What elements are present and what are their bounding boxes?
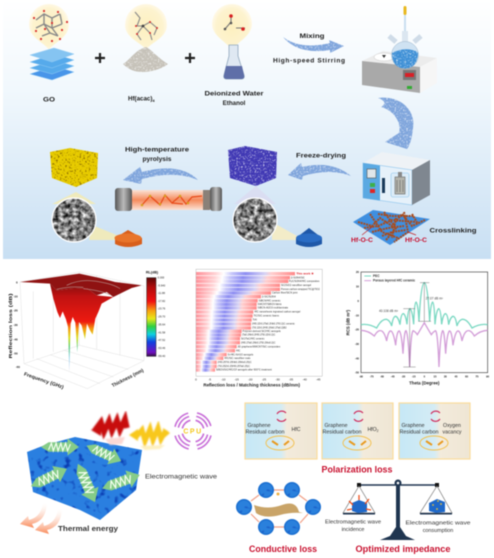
x axis ticks: 60 [465, 375, 469, 379]
colorbar: -17.82 [158, 299, 166, 303]
colorbar: -47.52 [158, 338, 166, 342]
label: High-temperature pyrolysis: pyrolysis [143, 156, 172, 163]
bar labels: PyC/Si3N4/HfC composites [289, 280, 320, 283]
icon: conductive network [236, 482, 321, 535]
y axis ticks: 20 [356, 270, 359, 274]
x axis ticks: -15 [412, 375, 416, 379]
icon: Hf(acac)4 molecule and powder [123, 4, 168, 72]
panel: polarization oxygen vacancy: Graphene [402, 423, 425, 429]
panel: polarization oxygen vacancy: Oxygen [443, 423, 461, 429]
x axis ticks: -60 [380, 375, 384, 379]
label: Mixing: Mixing [300, 33, 324, 40]
y axis title: RCS (dB m²) [345, 309, 350, 335]
x axis ticks: -45 [316, 377, 321, 381]
colorbar: -35.64 [158, 322, 166, 326]
x axis ticks: -15 [234, 377, 239, 381]
panel: polarization HfO2: HfO [367, 427, 377, 433]
panel: polarization HfC: HfC [292, 427, 301, 433]
colorbar: -41.58 [158, 330, 166, 334]
y axis title: Reflection loss (dB) [8, 293, 14, 358]
arrow: mixing [283, 37, 344, 53]
icon: green coil arrows [27, 438, 143, 506]
label: Electromagnetic wave: Electromagnetic wave [145, 474, 218, 480]
colorbar: -5.940 [158, 283, 166, 287]
icon: blue foam cube, SEM and powder [228, 146, 322, 247]
back panes and floor grid [20, 272, 144, 389]
label: GO: GO [43, 96, 55, 104]
icon: GO molecule and layers [29, 4, 74, 80]
icon: plus [185, 53, 195, 63]
x axis ticks: -20 [248, 377, 253, 381]
thickness axis title: Thickness (mm) [111, 368, 145, 389]
colorbar: -59.40 [158, 354, 166, 358]
arrow: freeze-drying [288, 163, 351, 180]
legend [364, 274, 415, 283]
icon: crosslinked network [353, 210, 430, 245]
bar labels: SiBCN/SiC/HfC/CF aerogels after 900°C treatment [216, 369, 272, 372]
x axis ticks: -5 [208, 377, 211, 381]
x axis ticks [359, 375, 490, 379]
bar labels: (Hf0.2Zr0.2Ta0.2Nb0.2Ti0.2)C ceramic [252, 323, 295, 326]
icon: oven with autoclave [363, 152, 430, 205]
bar labels: TiC/SiC ceramic foams [254, 315, 280, 318]
panel: polarization oxygen vacancy: Residual carbon [400, 430, 439, 436]
panel: polarization HfC: Graphene [248, 423, 271, 429]
colorbar: -23.76 [158, 307, 166, 311]
colorbar: -53.46 [158, 346, 166, 350]
panel: polarization HfC: Residual carbon [246, 430, 285, 436]
x axis ticks: 90 [486, 375, 490, 379]
label: Crosslinking: Crosslinking [430, 228, 476, 234]
colorbar: 0.000 [158, 276, 165, 280]
heading: Polarization loss: Polarization loss [322, 464, 392, 474]
label: Electromagnetic wave incidence: Electromagnetic wave [325, 520, 381, 526]
y axis ticks: -30 [355, 342, 359, 346]
y axis ticks: -10 [355, 313, 359, 317]
arrow: pyrolysis [123, 167, 198, 184]
annotation: left peak: 40.108 dB m² [379, 309, 398, 313]
colorbar: -29.70 [158, 315, 166, 319]
icon: yellow foam cube, SEM and powder [50, 148, 142, 247]
label: Freeze-drying: Freeze-drying [296, 152, 346, 160]
y axis ticks: -40 [13, 337, 18, 341]
colorbar: RL(dB) [146, 271, 159, 275]
y axis ticks: 0 [357, 299, 359, 303]
x axis ticks: 15 [434, 375, 437, 379]
arrow: to crosslinking [378, 98, 413, 149]
panel: polarization HfO2: 2 [377, 429, 379, 433]
label: Hf-O-C left: Hf-O-C [351, 237, 374, 244]
colorbar [146, 271, 166, 358]
bar labels: (Hf0.2Ta0.2Nb0.2Ti0.2Mo0.2)C [241, 341, 276, 344]
bar labels: (Ti0.2Zr0.2Hf0.2Nb0.2Ta0.2)B2 [252, 327, 287, 330]
heading: Conductive loss: Conductive loss [249, 544, 317, 554]
chart: RCS versus theta [345, 270, 490, 386]
bar labels: SiBCN-Al2O3 multilaminate [258, 307, 289, 310]
y axis ticks: 0 [16, 280, 18, 284]
x axis ticks: -75 [370, 375, 374, 379]
bar labels: (Ta0.2Nb0.2Hf0.2Ti0.2Zr0.2)C [242, 334, 276, 337]
panel: polarization HfC [245, 403, 317, 459]
bar labels: SWCNT/SiBCN fabric [258, 303, 282, 306]
bar labels: Si-HfC-N/rGO aerogels [228, 353, 254, 356]
bar labels: TiAl [253, 319, 257, 322]
bar labels: β-Si3N4/SiC [291, 276, 305, 279]
chart: reflection loss / matching thickness comparison [195, 269, 322, 388]
green curve [361, 283, 488, 328]
label: Electromagnetic wave consumption: consumption [423, 528, 453, 534]
heading: Optimized impedance: Optimized impedance [356, 544, 450, 554]
label: High-speed Stirring: High-speed Stirring [273, 58, 345, 64]
x axis ticks: 30 [444, 375, 447, 379]
icon: yellow incoming wave [129, 428, 170, 450]
bar labels: HfC [236, 349, 240, 352]
annotation lines [403, 283, 431, 367]
label: Deionized Water Ethanol: Deionized Water [204, 90, 264, 98]
bars [196, 272, 295, 372]
y axis ticks: -30 [13, 323, 18, 327]
panel: polarization HfO2: Residual carbon [322, 430, 362, 436]
x axis ticks: -90 [359, 375, 363, 379]
icon: tube furnace [115, 187, 222, 211]
colorbar: -11.88 [158, 291, 166, 295]
label: Deionized Water Ethanol: Ethanol [223, 100, 246, 107]
x axis ticks: -30 [275, 377, 280, 381]
x axis ticks: -25 [262, 377, 266, 381]
bar labels: β-SiC/Si3N4 [262, 295, 276, 298]
bar labels: HfC/SiC nanofiber mats [224, 357, 251, 360]
x axis ticks: 75 [476, 375, 479, 379]
label: High-temperature pyrolysis: High-temperature [125, 146, 189, 154]
y axis ticks: -50 [355, 371, 359, 375]
x axis title: Reflection loss / Matching thickness (dB/mm) [203, 383, 301, 388]
panel: polarization oxygen vacancy [399, 403, 470, 459]
axes frame [196, 269, 322, 376]
bar labels: HfC nanosheets ingrained carbon aerogel [254, 311, 301, 314]
pink curve [361, 323, 488, 367]
icon: ethanol molecule and flask [212, 4, 252, 79]
icon: red reflected wave [91, 419, 127, 445]
bar labels: SiC/TaC/HfC ceramic [241, 337, 265, 340]
x axis ticks: 0 [195, 377, 197, 381]
bar labels: Polymer-derived SiC/HfC aerogels [243, 330, 281, 333]
bar labels: SiC/SiO2 nanofiber aerogel [281, 284, 312, 287]
chart: 3D reflection loss surface [8, 271, 166, 391]
bar labels [216, 272, 320, 372]
panel: stealth mechanism foam [20, 412, 218, 534]
x axis ticks: -40 [302, 377, 307, 381]
bar labels: This work ★ [296, 272, 314, 276]
x axis ticks: -10 [221, 377, 226, 381]
panel: polarization HfO2: Graphene [324, 423, 348, 429]
surface [20, 282, 113, 372]
bar labels: 3D graphene/MWCNT/SiC composites [238, 345, 281, 348]
legend: PEC [373, 274, 380, 278]
panel background [3, 0, 491, 259]
icon: blue foam block [27, 437, 142, 520]
y axis ticks: 10 [356, 284, 359, 288]
x axis ticks [195, 377, 321, 381]
frame [361, 272, 488, 373]
y axis ticks: -50 [13, 351, 18, 355]
bar labels: Carbon fiber/SiCN joint [272, 292, 298, 295]
label: Hf(acac)4: 4 [152, 98, 155, 103]
label: Electromagnetic wave incidence: incidence [342, 527, 364, 533]
annotations: 27.07 dB m² [426, 296, 443, 300]
surface top [20, 274, 142, 297]
x axis ticks: 0 [424, 375, 426, 379]
label: Hf(acac)4: Hf(acac) [128, 96, 152, 102]
x axis title: Theta (Degree) [409, 381, 440, 386]
x axis ticks: -35 [289, 377, 293, 381]
y axis ticks: -40 [355, 356, 359, 360]
bar labels: (Ti0.25Zr0.25Hf0.25Ta0.25)C [218, 365, 250, 368]
icon: water bath with flask [362, 6, 437, 93]
x axis ticks: -30 [401, 375, 406, 379]
icon: thermal arrows [20, 503, 62, 534]
icon: plus [95, 53, 105, 63]
label: Electromagnetic wave consumption: Electromagnetic wave [406, 520, 471, 526]
y axis ticks [13, 280, 20, 369]
panel: synthesis process [3, 0, 491, 259]
y axis ticks [355, 270, 359, 375]
bar labels: (Hf0.25Ti0.25Nb0.25Mo0.25)C [218, 361, 252, 364]
panel: polarization oxygen vacancy: vacancy [442, 430, 462, 436]
icon: balance scale [343, 480, 452, 540]
x axis ticks: -45 [391, 375, 395, 379]
bar labels: SiBCN/HfC ceramic [259, 299, 281, 302]
y axis ticks: -20 [355, 328, 359, 332]
x axis ticks: 45 [455, 375, 458, 379]
x axis title: Frequency (GHz) [23, 371, 65, 391]
icon: CPU signal: CPU [183, 428, 203, 436]
panel: polarization HfO2 [322, 403, 393, 459]
y axis ticks: -10 [13, 295, 18, 299]
label: Thermal energy: Thermal energy [58, 524, 119, 533]
label: Hf-O-C right: Hf-O-C [405, 237, 428, 244]
bar labels: Porous carbon-wrapped TiC@TiO2 [281, 288, 320, 291]
y axis ticks: -20 [13, 309, 18, 313]
icon: CPU signal [174, 412, 212, 450]
y axis ticks: -60 [16, 365, 20, 369]
legend: Porous layered HfC ceramic [373, 279, 415, 283]
